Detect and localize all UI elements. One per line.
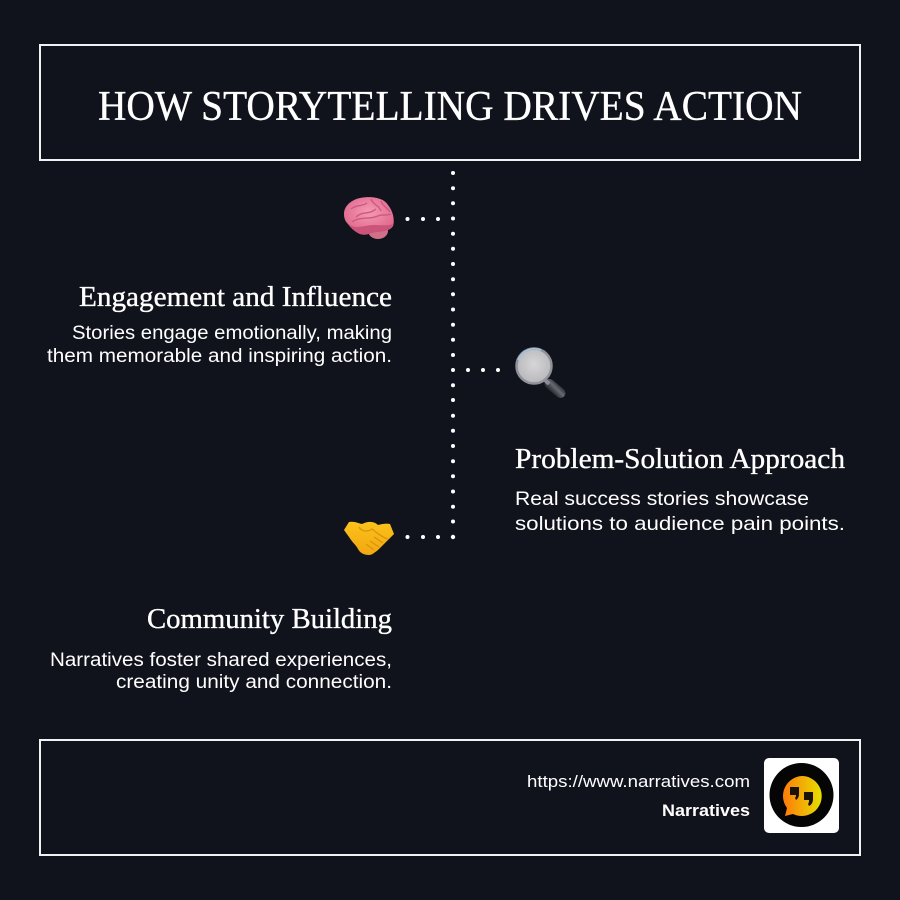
section: Community Building xyxy=(50,604,392,693)
body text: Stories engage emotionally, making xyxy=(72,323,392,344)
body text: Narratives foster shared experiences, xyxy=(50,650,392,671)
icon: handshake xyxy=(344,522,394,555)
title: HOW STORYTELLING DRIVES ACTION xyxy=(98,84,802,130)
heading: Problem-Solution Approach xyxy=(515,444,845,475)
heading: Community Building xyxy=(147,604,392,635)
section: Problem-Solution Approach xyxy=(515,444,845,535)
body text xyxy=(515,488,845,535)
footer panel xyxy=(40,740,860,855)
body text: them memorable and inspiring action. xyxy=(47,346,392,367)
title panel xyxy=(40,45,860,160)
icon: magnifying glass xyxy=(516,348,560,393)
body text: creating unity and connection. xyxy=(116,672,392,693)
body text xyxy=(47,323,392,367)
footer url: https://www.narratives.com xyxy=(527,773,750,791)
heading: Engagement and Influence xyxy=(79,282,392,313)
logo xyxy=(764,758,839,833)
icon: brain xyxy=(344,197,394,239)
dotted timeline xyxy=(406,171,500,539)
footer brand name: Narratives xyxy=(662,802,750,820)
section: Engagement and Influence xyxy=(47,282,392,367)
body text: Real success stories showcase xyxy=(515,488,809,510)
body text: solutions to audience pain points. xyxy=(515,513,845,535)
body text xyxy=(50,650,392,693)
